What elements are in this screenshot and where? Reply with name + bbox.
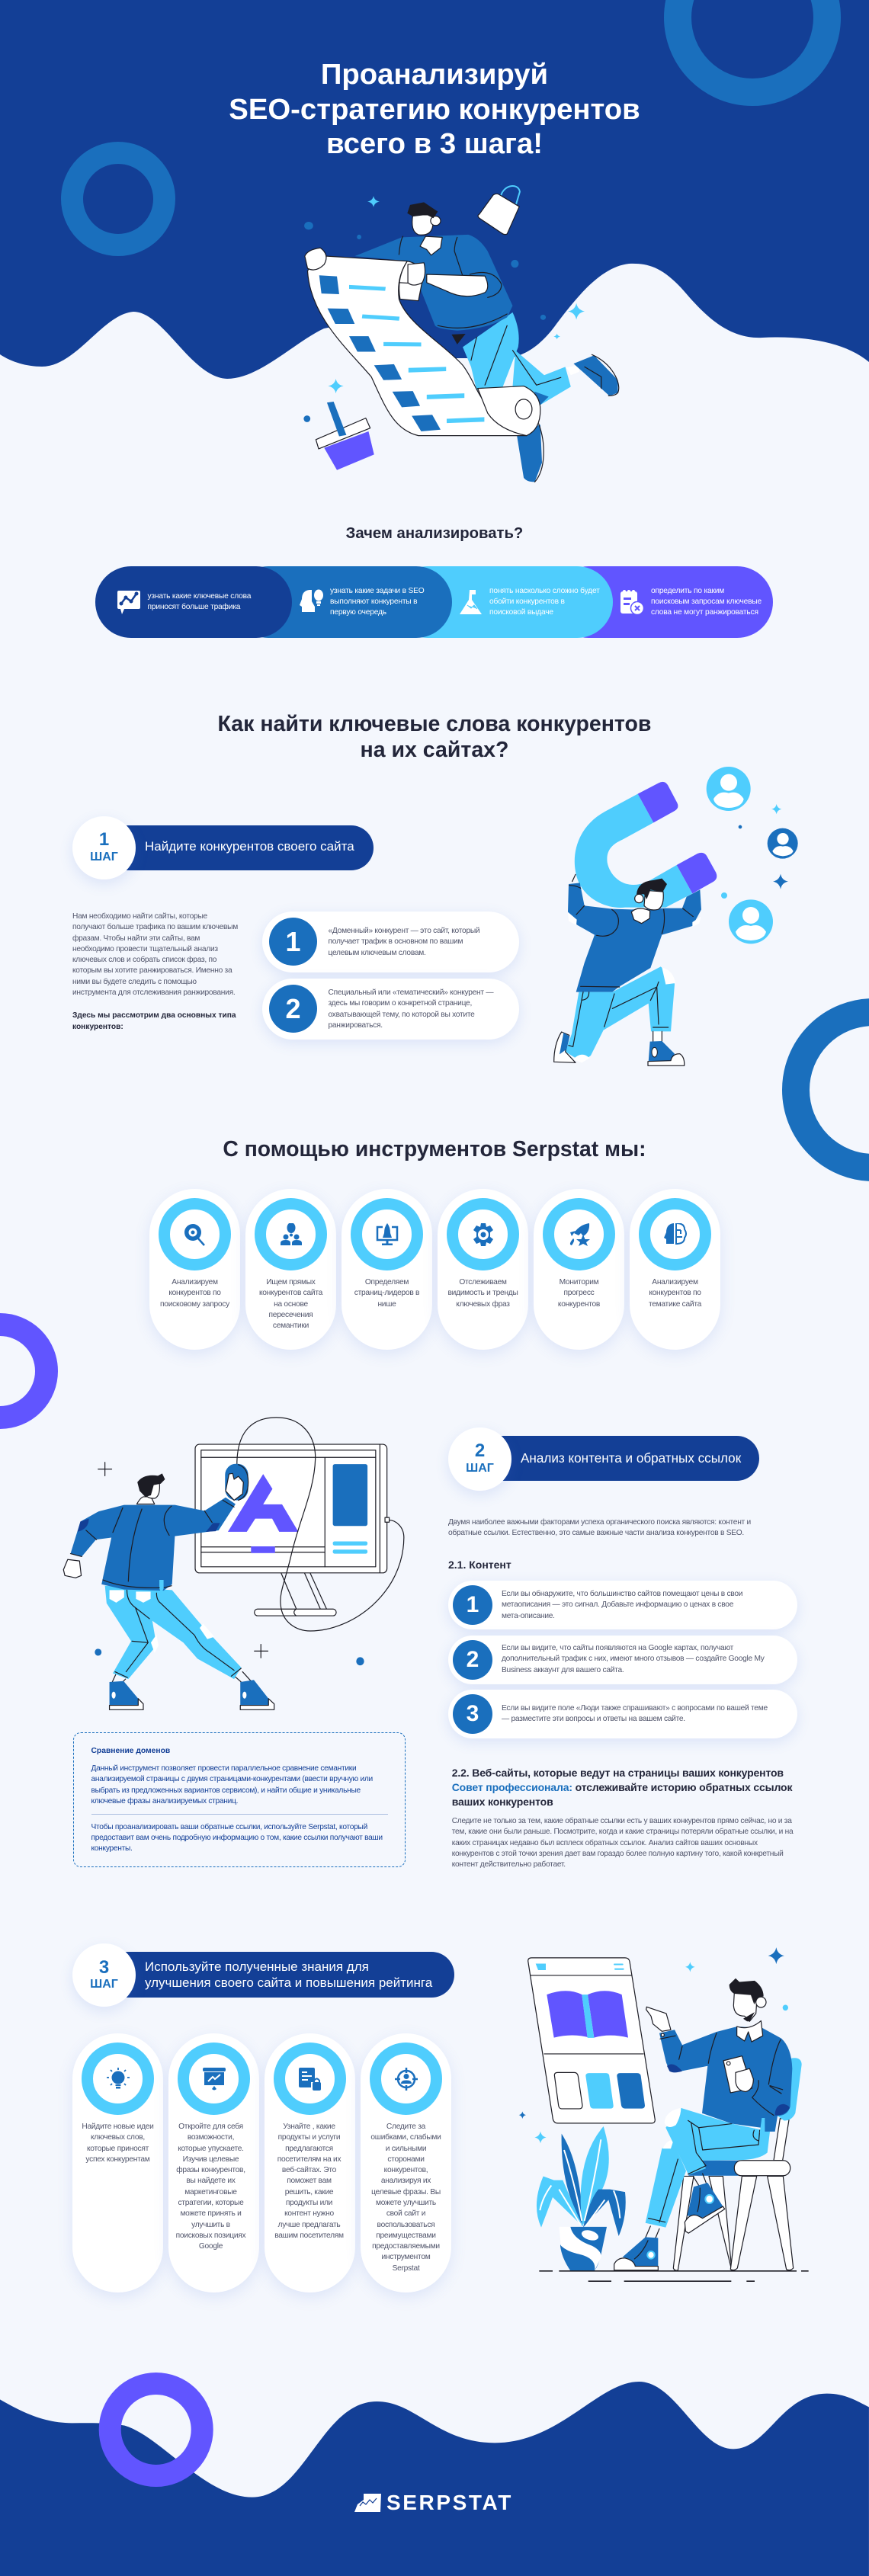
card text: Специальный или «тематический» конкурент — (328, 988, 493, 997)
text (447, 1278, 518, 1309)
hands (305, 248, 502, 297)
step 2 badge: ШАГ (466, 1462, 494, 1475)
reason 4 pill (553, 566, 773, 638)
step 1 badge (72, 816, 136, 879)
callout text: Данный инструмент позволяет провести параллельное сравнение семантики (91, 1764, 356, 1773)
lower leg (614, 2140, 686, 2270)
card text: охватывающей тему, по которой вы хотите (328, 1011, 475, 1019)
ring: right side (796, 1012, 869, 1168)
text (649, 1278, 701, 1309)
text: step 1 intro (72, 912, 238, 997)
text (160, 1278, 230, 1309)
number 1 (269, 918, 317, 966)
text (502, 1704, 768, 1723)
text (558, 1278, 600, 1309)
magnet illustration (554, 767, 798, 1065)
text: Мониторим (560, 1278, 598, 1286)
dots (303, 222, 546, 422)
text (502, 1590, 742, 1620)
text: анализируя их (381, 2177, 431, 2185)
content card 1 (448, 1581, 797, 1629)
icon: target person (370, 2043, 442, 2115)
ring: left purple (0, 1325, 46, 1418)
tool card 3 (342, 1189, 432, 1350)
text: метаописания — это сигнал. Добавьте информацию о ценах в свое (502, 1600, 733, 1609)
text: Отслеживаем (459, 1278, 507, 1286)
card: domain competitor (262, 912, 519, 972)
text: которые приносят (87, 2145, 149, 2153)
logo mark (228, 1474, 298, 1532)
tip card 1 (72, 2033, 163, 2292)
text: two competitor types: Здесь мы рассмотрим два основных типа (72, 1011, 236, 1020)
text (176, 2123, 245, 2251)
number (453, 1585, 492, 1625)
jeans (463, 312, 561, 390)
callout text 2: конкуренты. (91, 1844, 133, 1853)
text: тематике сайта (649, 1300, 701, 1309)
sparkles (519, 1947, 788, 2143)
icon: mountain with flag (460, 590, 482, 614)
heading: how to find keywords (218, 712, 651, 762)
icon: magnifier eye (159, 1198, 231, 1270)
tip card 4 (361, 2033, 451, 2292)
step 2 badge (448, 1427, 511, 1491)
text: страниц-лидеров в (354, 1289, 419, 1297)
upper leg (665, 2108, 770, 2233)
reason 2 pill (232, 566, 452, 638)
text: step 1 intro: инструмента для отслеживания ранжирования. (72, 988, 235, 997)
icon: presentation (178, 2043, 250, 2115)
reason 1 pill (95, 566, 292, 638)
plant (537, 2126, 626, 2270)
text: конкурентов по (168, 1289, 221, 1297)
text: свой сайт и (386, 2209, 425, 2218)
text: преимуществами (376, 2232, 436, 2240)
man jeans (566, 966, 675, 1062)
text: step 1 intro: необходимо провести тщательный анализ (72, 945, 218, 953)
floor lines (539, 2271, 809, 2281)
torso (659, 2027, 792, 2133)
reason 2 text: выполняют конкуренты в (330, 598, 417, 606)
number (453, 1640, 492, 1680)
text: step 1 intro: получают больше трафика по вашим ключевым (72, 923, 238, 931)
text: 2.2 paragraph: контент действительно работает. (452, 1860, 566, 1869)
text: посетителям на их (277, 2155, 341, 2164)
text: step 2 intro: Двумя наиболее важными факторами успеха органического поиска являются: контент и (448, 1518, 751, 1527)
text: Ищем прямых (266, 1278, 316, 1286)
text: конкурентов, (384, 2166, 428, 2174)
text (259, 1278, 323, 1330)
text: поисковому запросу (160, 1300, 229, 1309)
head and hair (407, 202, 442, 255)
text: фразы конкурентов, (176, 2166, 245, 2174)
title: всего в 3 шага! (326, 127, 543, 160)
step 1 bar: Найдите конкурентов своего сайта (145, 839, 354, 854)
text: мета-описание. (502, 1612, 555, 1620)
panel: tools cards (146, 1189, 723, 1357)
text: ключевых слов, (91, 2133, 145, 2142)
pointing hand (646, 2007, 671, 2036)
text (274, 2123, 344, 2240)
content card 3 (448, 1690, 797, 1738)
number (453, 1694, 492, 1734)
text: конкурентов по (649, 1289, 701, 1297)
step 2 header (446, 1427, 759, 1498)
text: — разместите эти вопросы и ответы на вашем сайте. (502, 1715, 685, 1723)
step 2 badge: 2 (475, 1440, 485, 1461)
text: можете улучшить (376, 2199, 436, 2207)
icon: light bulb (82, 2043, 154, 2115)
step 2 bar: Анализ контента и обратных ссылок (521, 1451, 741, 1466)
scroll (307, 256, 540, 436)
card text: получает трафик в основном по вашим (328, 937, 463, 946)
text: two competitor types (72, 1011, 236, 1031)
text: прогресс (563, 1289, 595, 1297)
heading: why analyze: Зачем анализировать? (346, 525, 523, 542)
text: воспользоваться (377, 2221, 434, 2229)
text: 2.2 paragraph: конкурентов с этой точки зрения дает вам гораздо более полную картину того, какой конкретный (452, 1850, 784, 1858)
icon: head brain (639, 1198, 711, 1270)
text: сторонами (387, 2155, 425, 2164)
text: 2.2 paragraph: каких страницах недавно был всплеск обратных ссылок. Анализ сайтов ваших основных (452, 1839, 758, 1847)
reason 2 text: узнать какие задачи в SEO (330, 587, 424, 595)
heading: with Serpstat tools: С помощью инструментов Serpstat мы: (223, 1136, 646, 1161)
text: и сильными (386, 2145, 426, 2153)
number: 2 (467, 1647, 479, 1672)
text: видимость и тренды (447, 1289, 518, 1297)
reason 2 text: первую очередь (330, 608, 386, 617)
text: успех конкурентам (85, 2155, 150, 2164)
number 2 (269, 985, 317, 1033)
callout text (91, 1764, 373, 1805)
callout text 2 (91, 1823, 383, 1853)
callout text 2: предоставит вам очень подробную информацию о том, какие ссылки получают ваши (91, 1834, 383, 1842)
reason 1 text (148, 592, 252, 611)
tool card 6 (630, 1189, 720, 1350)
text: продукты или (286, 2199, 332, 2207)
monitor (195, 1444, 387, 1616)
step 1 badge: 1 (99, 829, 109, 850)
tool card 5 (534, 1189, 624, 1350)
text: Serpstat (393, 2264, 419, 2273)
text: Google (199, 2242, 223, 2251)
heading: 2.1 content: 2.1. Контент (448, 1559, 511, 1571)
text: целевые фразы. Вы (371, 2188, 441, 2196)
text: которые упускаете. (178, 2145, 244, 2153)
scroll rows (319, 275, 484, 431)
reason 4 text: слова не могут ранжироваться (651, 608, 758, 617)
web page panel (528, 1958, 655, 2123)
chair back (778, 2058, 802, 2120)
panel: four reasons pills (95, 566, 773, 638)
reason 1 text: приносят больше трафика (148, 603, 240, 611)
text: конкурентов (558, 1300, 600, 1309)
magnet (575, 782, 717, 908)
tool card 4 (438, 1189, 528, 1350)
logo icon (354, 2494, 381, 2512)
step 3 bar: Используйте полученные знания для (145, 1959, 369, 1974)
text: улучшить в (191, 2221, 230, 2229)
text: предлагаются (285, 2145, 333, 2153)
text: step 2 intro: обратные ссылки. Естественно, это самые важные части анализа конкурентов в SEO. (448, 1529, 744, 1537)
content card 2 (448, 1636, 797, 1684)
text: ключевых фраз (456, 1300, 510, 1309)
ring: top left (72, 152, 165, 245)
text: предоставляемыми (372, 2242, 440, 2251)
text: лучше предлагать (278, 2221, 340, 2229)
text: маркетинговые (184, 2188, 237, 2196)
tip card 3 (265, 2033, 355, 2292)
text: поисковых позициях (176, 2232, 245, 2240)
callout title: Сравнение доменов (91, 1747, 170, 1755)
text: step 1 intro: Нам необходимо найти сайты, которые (72, 912, 207, 921)
tool card 2 (245, 1189, 336, 1350)
sparkles (95, 1463, 364, 1665)
step 1 header (70, 816, 374, 886)
hand and head (63, 1473, 165, 1578)
step 1 badge: ШАГ (90, 851, 118, 863)
sparkles and dots (328, 196, 585, 393)
text: Следите за (386, 2123, 425, 2131)
text: Откройте для себя (178, 2123, 243, 2131)
icon: monitor rocket (351, 1198, 423, 1270)
text: семантики (273, 1322, 309, 1330)
text: Анализируем (652, 1278, 698, 1286)
jeans (105, 1586, 241, 1679)
heading: 2.2 websites: 2.2. Веб-сайты, которые ведут на страницы ваших конкурентов (452, 1767, 784, 1779)
icon: calendar with cross (620, 590, 643, 614)
reason 3 pill (392, 566, 613, 638)
number 1: 1 (285, 926, 301, 957)
reason 1 text: узнать какие ключевые слова (148, 592, 251, 601)
text: step 1 intro: фразам. Чтобы найти эти сайты, вам (72, 934, 200, 943)
card text: «Доменный» конкурент — это сайт, который (328, 927, 479, 935)
icon: rocket star (543, 1198, 615, 1270)
icon: gear eye (447, 1198, 519, 1270)
head (730, 1978, 766, 2042)
step 3 header (70, 1943, 454, 2014)
text: стратегии, которые (178, 2199, 244, 2207)
step 3 badge (72, 1943, 136, 2007)
tool card 1 (149, 1189, 240, 1350)
tip card 2 (168, 2033, 259, 2292)
shopping bag (478, 186, 520, 235)
text: Business аккаунт для вашего сайта. (502, 1666, 624, 1674)
reason 4 text: поисковым запросам ключевые (651, 598, 762, 606)
lower foot (517, 424, 544, 482)
text: возможности, (188, 2133, 234, 2142)
phone and hand (723, 2056, 753, 2093)
cable (237, 1418, 404, 1631)
mouse and hand (225, 1464, 249, 1501)
step 2 bar (479, 1436, 759, 1481)
reason 3 text: понять насколько сложно будет (489, 587, 600, 595)
text: step 1 intro: ними вы будете следить с помощью (72, 978, 197, 986)
icon: chart bubble (117, 591, 140, 614)
text (370, 2123, 441, 2273)
text: на основе (274, 1300, 308, 1309)
step 1 bar (104, 825, 374, 870)
title: SEO-стратегию конкурентов (229, 93, 640, 126)
text: вашим посетителям (274, 2232, 344, 2240)
footer wave (0, 2382, 869, 2576)
icon: head with lightbulb (300, 590, 323, 612)
logo text: SERPSTAT (386, 2491, 513, 2514)
text: контент нужно (284, 2209, 334, 2218)
text: решить, какие (285, 2188, 333, 2196)
text (82, 2123, 154, 2164)
callout text: выбрать из предложенных вариантов сервисом), и найти общие и уникальные (91, 1786, 361, 1795)
reason 4 text: определить по каким (651, 587, 724, 595)
seated man illustration (519, 1947, 809, 2281)
text: two competitor types: конкурентов: (72, 1023, 123, 1031)
text: Если вы видите, что сайты появляются на Google картах, получают (502, 1644, 733, 1652)
text: step 1 intro: которым вы хотите ранжироваться. Именно за (72, 966, 232, 975)
text: Изучив целевые (183, 2155, 239, 2164)
man sweater (568, 874, 701, 992)
shoes (110, 1672, 274, 1709)
text: вы найдете их (186, 2177, 236, 2185)
text: step 1 intro: ключевых слов и собрать список фраз, по (72, 956, 216, 964)
sparkles (721, 804, 788, 899)
panel: step 3 cards (70, 2033, 454, 2299)
text: Если вы видите поле «Люди также спрашивают» с вопросами по вашей теме (502, 1704, 768, 1713)
card text: целевым ключевым словам. (328, 949, 426, 957)
monitor illustration (63, 1418, 404, 1709)
text: пересечения (269, 1311, 313, 1319)
card text (328, 988, 494, 1030)
panel: domain comparison callout (73, 1732, 406, 1867)
card text: здесь мы говорим о конкретной странице, (328, 999, 472, 1008)
text: дополнительный трафик с них, имеют много отзывов — создайте Google My (502, 1655, 765, 1663)
card text: ранжироваться. (328, 1021, 383, 1030)
heading: 2.2 websites (452, 1767, 793, 1808)
ring: top right (678, 0, 827, 92)
shoes (554, 1031, 685, 1065)
step 3 bar (104, 1952, 454, 1998)
reason 3 text: обойти конкурентов в (489, 598, 565, 606)
sweater (70, 1498, 236, 1593)
text: Найдите новые идеи (82, 2123, 154, 2131)
text: конкурентов сайта (259, 1289, 322, 1297)
step 3 bar: улучшения своего сайта и повышения рейтинга (145, 1975, 432, 1990)
callout text: анализируемой страницы с двумя страницами-конкурентами (ввести вручную или (91, 1775, 373, 1783)
icon: document lock (274, 2043, 346, 2115)
text: поможет вам (287, 2177, 332, 2185)
text: 2.2 paragraph (451, 1817, 794, 1869)
ring: footer purple (110, 2384, 202, 2475)
reason 2 text (330, 587, 424, 617)
text: веб-сайтах. Это (282, 2166, 336, 2174)
avatars (707, 767, 798, 944)
text: можете принять и (180, 2209, 242, 2218)
text: Определяем (365, 1278, 409, 1286)
text: Если вы обнаружите, что большинство сайтов помещают цены в свои (502, 1590, 742, 1598)
text (502, 1644, 765, 1674)
number: 3 (467, 1701, 479, 1726)
stool (673, 2119, 794, 2270)
sweater (354, 235, 512, 344)
man head (631, 879, 667, 924)
basket (316, 402, 374, 470)
number: 1 (467, 1592, 479, 1617)
callout text: ключевые фразы анализируемых страниц. (91, 1797, 238, 1805)
hero illustration: man with scroll (303, 186, 619, 482)
number 2: 2 (285, 993, 301, 1024)
icon: people (255, 1198, 327, 1270)
card text (328, 927, 479, 957)
heading: 2.2 websites: ваших конкурентов (452, 1796, 553, 1808)
text: инструментом (381, 2253, 430, 2261)
text: Узнайте , какие (283, 2123, 335, 2131)
heading: how to find keywords: Как найти ключевые слова конкурентов (218, 712, 651, 736)
heading: how to find keywords: на их сайтах? (361, 738, 508, 762)
reason 3 text (489, 587, 600, 617)
reason 4 text (651, 587, 762, 617)
step 3 badge: 3 (99, 1957, 109, 1978)
text (354, 1278, 419, 1309)
heading: 2.2 websites: Совет профессионала: отслеживайте историю обратных ссылок (452, 1780, 792, 1793)
reason 3 text: поисковой выдаче (489, 608, 553, 617)
text: продукты и услуги (278, 2133, 340, 2142)
text: 2.2 paragraph: тем, какие они были раньше. Посмотрите, когда и какие страницы потеряли обратные ссылки, и на (452, 1828, 793, 1836)
text: ошибками, слабыми (370, 2133, 441, 2142)
card: topical competitor (262, 979, 519, 1040)
header wave (0, 0, 869, 379)
callout text 2: Чтобы проанализировать ваши обратные ссылки, используйте Serpstat, который (91, 1823, 367, 1831)
step 3 badge: ШАГ (90, 1978, 118, 1991)
title: Проанализируй (321, 58, 548, 91)
right leg and foot (512, 351, 619, 405)
title (229, 58, 640, 160)
text: Анализируем (172, 1278, 218, 1286)
text: step 2 intro (448, 1518, 751, 1537)
text: 2.2 paragraph: Следите не только за тем, какие обратные ссылки есть у ваших конкурентов прямо сейчас, но и за (452, 1817, 792, 1825)
text: нише (377, 1300, 396, 1309)
